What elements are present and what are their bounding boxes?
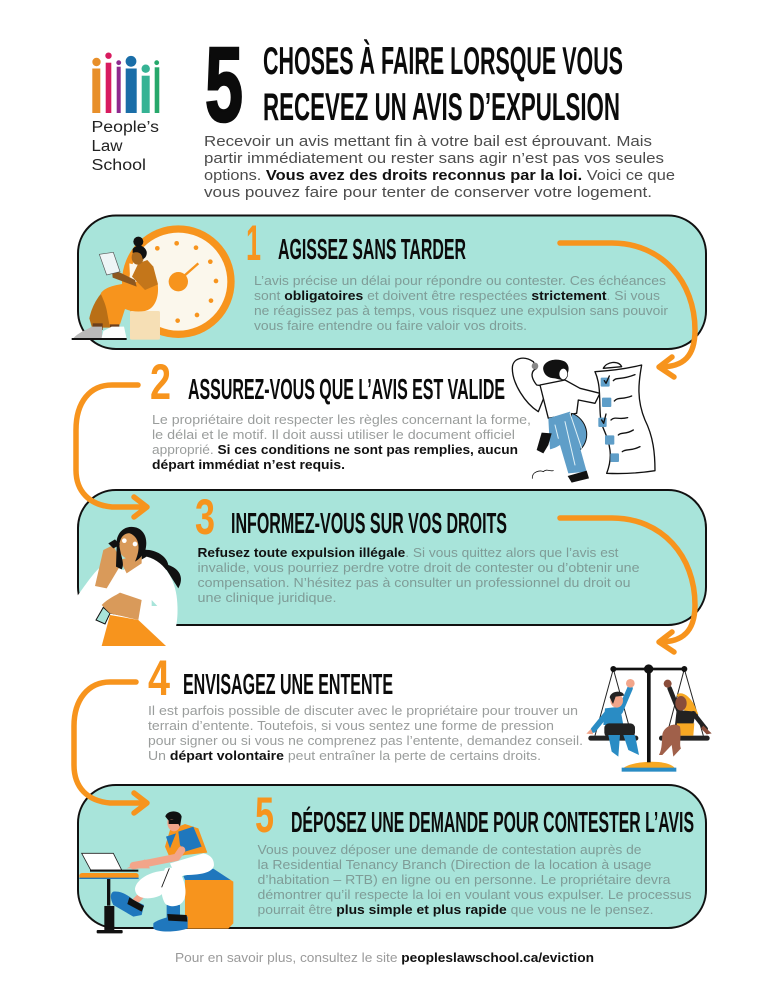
step 2 number: 2 bbox=[150, 354, 171, 410]
step 3 text: compensation. N’hésitez pas à consulter un professionnel du droit ou bbox=[198, 576, 630, 590]
title bbox=[205, 26, 623, 144]
panel: step 5 background bbox=[78, 785, 706, 928]
step 3 heading: INFORMEZ-VOUS SUR VOS DROITS bbox=[231, 508, 507, 540]
step 2 text: approprié. Si ces conditions ne sont pas remplies, aucun bbox=[152, 443, 518, 457]
arrow: step 4 to step 5 bbox=[74, 682, 147, 813]
step 5 text: pourrait être plus simple et plus rapide que vous ne le pensez. bbox=[258, 903, 654, 917]
logo: People's Law School: Law bbox=[92, 138, 123, 155]
intro text: vous pouvez faire pour tenter de conserver votre logement. bbox=[204, 185, 652, 201]
step 4 number: 4 bbox=[148, 650, 170, 706]
logo: People's Law School: School bbox=[92, 157, 146, 174]
arrow: step 2 to step 3 bbox=[76, 385, 147, 517]
step 1 text: vous faire entendre ou faire valoir vos droits. bbox=[254, 319, 527, 333]
step 1 heading: AGISSEZ SANS TARDER bbox=[278, 234, 466, 266]
step 1 bbox=[246, 215, 668, 333]
step 5 text: démontrer qu’il respecte la loi en voulant vous expulser. Le processus bbox=[258, 888, 692, 902]
step 2 text: Le propriétaire doit respecter les règles concernant la forme, bbox=[152, 413, 531, 427]
step 3 number: 3 bbox=[195, 489, 215, 545]
step 2 text: départ immédiat n’est requis. bbox=[152, 458, 345, 472]
intro text: Recevoir un avis mettant fin à votre bail est éprouvant. Mais bbox=[204, 134, 652, 150]
step 3 text: une clinique juridique. bbox=[198, 591, 336, 605]
step 5 number: 5 bbox=[255, 787, 274, 843]
illustration: woman and clock bbox=[72, 225, 235, 340]
step 5 bbox=[255, 787, 694, 917]
step 5 text: Vous pouvez déposer une demande de contestation auprès de bbox=[258, 843, 642, 857]
step 5 text bbox=[258, 843, 692, 917]
step 5 text: la Residential Tenancy Branch (Direction de la location à usage bbox=[258, 858, 652, 872]
step 4 heading: ENVISAGEZ UNE ENTENTE bbox=[183, 669, 393, 701]
logo: People's Law School bbox=[92, 52, 159, 174]
step 3 text: invalide, vous pourriez perdre votre droit de contester ou d’obtenir une bbox=[198, 561, 640, 575]
arrow: step 1 to step 2 bbox=[560, 243, 695, 377]
step 2 text bbox=[152, 413, 531, 472]
step 1 text: sont obligatoires et doivent être respectées strictement . Si vous bbox=[254, 289, 660, 303]
intro text bbox=[204, 134, 675, 201]
step 2 heading: ASSUREZ-VOUS QUE L’AVIS EST VALIDE bbox=[188, 374, 505, 406]
illustration: woman on phone bbox=[69, 527, 181, 648]
step 4 text: Un départ volontaire peut entraîner la perte de certains droits. bbox=[148, 749, 541, 763]
illustration: man at laptop bbox=[79, 811, 233, 933]
panel: step 3 background bbox=[78, 490, 706, 625]
step 4 text: terrain d’entente. Toutefois, si vous sentez une forme de pression bbox=[148, 719, 554, 733]
step 1 text: ne réagissez pas à temps, vous risquez une expulsion sans pouvoir bbox=[254, 304, 668, 318]
step 1 text bbox=[254, 274, 668, 333]
step 1 number: 1 bbox=[246, 215, 261, 271]
step 5 text: d’habitation – RTB) en ligne ou en personne. Le propriétaire devra bbox=[258, 873, 670, 887]
title: 5 bbox=[205, 26, 243, 144]
intro text: options. Vous avez des droits reconnus par la loi. Voici ce que bbox=[204, 168, 675, 184]
step 3 text bbox=[198, 546, 640, 605]
step 4 text bbox=[148, 704, 583, 763]
step 3 bbox=[195, 489, 640, 605]
footer: Pour en savoir plus, consultez le site peopleslawschool.ca/eviction bbox=[175, 950, 594, 965]
step 1 text: L’avis précise un délai pour répondre ou contester. Ces échéances bbox=[254, 274, 666, 288]
step 2 text: le délai et le motif. Il doit aussi utiliser le document officiel bbox=[152, 428, 515, 442]
illustration: woman with checklist bbox=[512, 358, 655, 483]
arrow: step 3 to step 4 bbox=[560, 518, 695, 652]
step 2 bbox=[150, 354, 531, 472]
intro text: partir immédiatement ou rester sans agir n’est pas vos seules bbox=[204, 151, 664, 167]
step 4 text: Il est parfois possible de discuter avec le propriétaire pour trouver un bbox=[148, 704, 578, 718]
step 3 text: Refusez toute expulsion illégale . Si vous quittez alors que l’avis est bbox=[198, 546, 619, 560]
step 4 text: pour signer ou si vous ne comprenez pas l’entente, demandez conseil. bbox=[148, 734, 583, 748]
logo: People's Law School: People’s bbox=[92, 119, 159, 136]
step 4 bbox=[148, 650, 583, 763]
panel: step 1 background bbox=[78, 216, 706, 349]
illustration: balance scale with two people bbox=[586, 664, 712, 772]
